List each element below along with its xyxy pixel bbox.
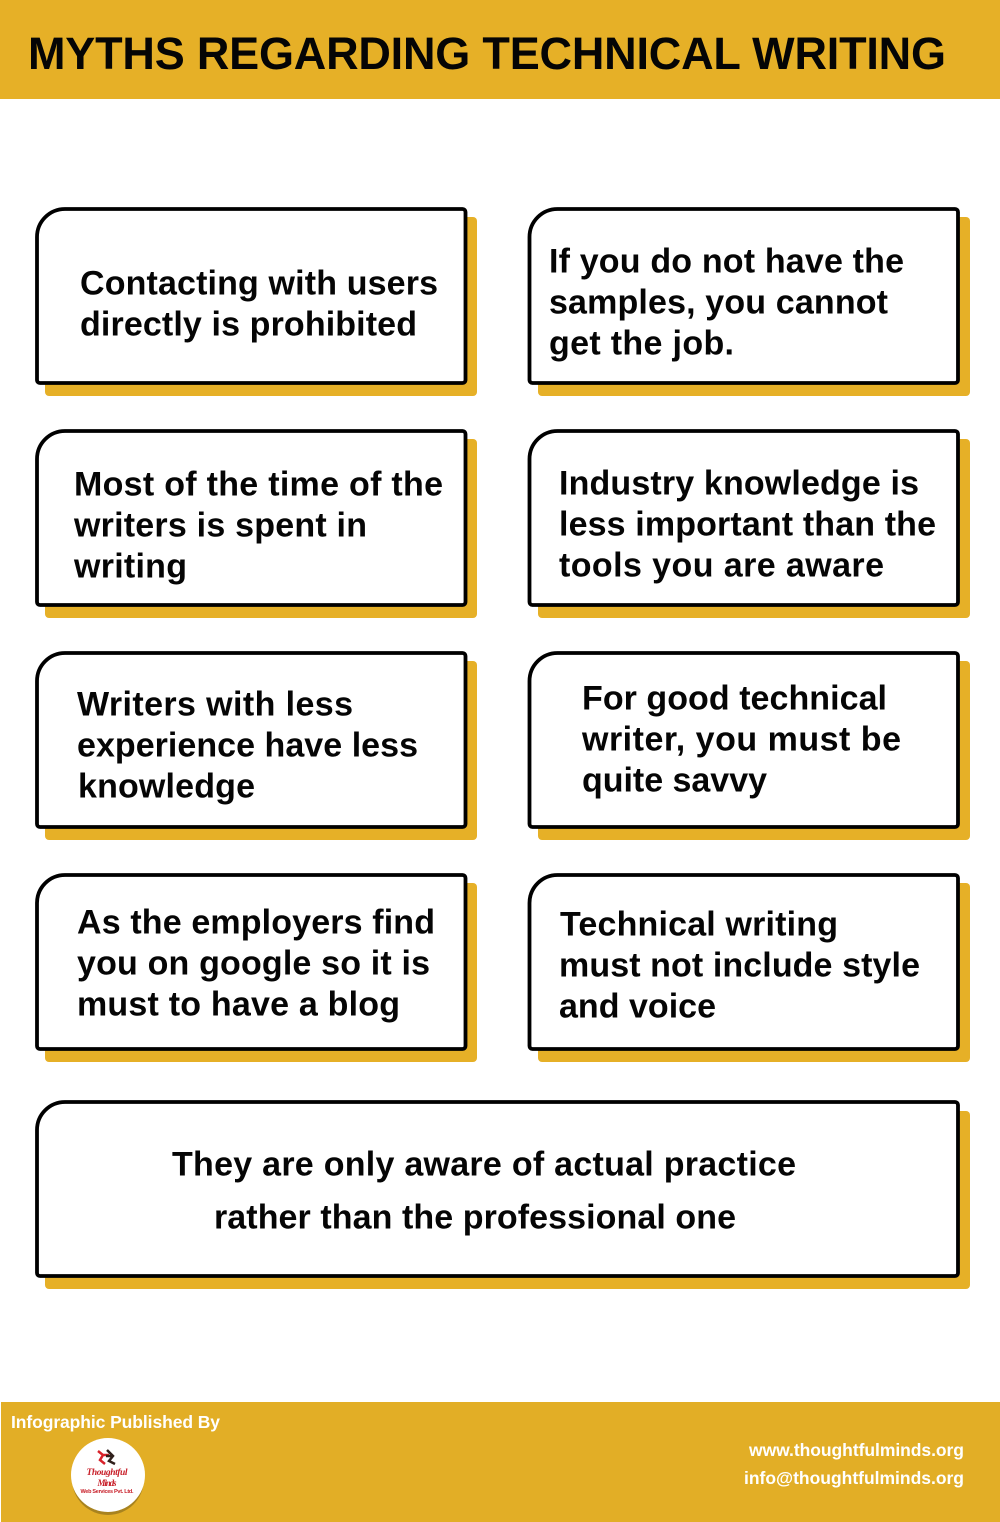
panel: myth 6 bbox=[530, 653, 970, 840]
myth 4 text bbox=[559, 464, 936, 584]
myth 3 text: Most of the time of the bbox=[74, 466, 443, 504]
myth 7 text: you on google so it is bbox=[77, 944, 430, 982]
myth 2 text bbox=[549, 242, 904, 362]
myth 9 text: rather than the professional one bbox=[214, 1198, 736, 1236]
myth 8 text bbox=[559, 906, 920, 1026]
myth 8 text: must not include style bbox=[559, 946, 920, 984]
footer contact details: www.thoughtfulminds.org bbox=[748, 1440, 964, 1460]
myth 9 text bbox=[172, 1146, 796, 1236]
panel: myth 8 bbox=[530, 875, 970, 1062]
myth 4 text: less important than the bbox=[559, 506, 936, 544]
myth 1 text bbox=[80, 264, 438, 344]
footer contact details bbox=[744, 1440, 964, 1488]
myth 8 text: Technical writing bbox=[560, 906, 838, 944]
footer contact details: info@thoughtfulminds.org bbox=[744, 1468, 964, 1488]
panel: myth 2 bbox=[530, 209, 970, 396]
panel: myth 4 bbox=[530, 431, 970, 618]
icon: publisher logo: Thoughtful bbox=[86, 1468, 128, 1478]
footer band bbox=[1, 1402, 1000, 1522]
myth 3 text: writing bbox=[73, 548, 187, 586]
footer heading: Infographic Published By bbox=[11, 1412, 220, 1432]
myth 4 text: Industry knowledge is bbox=[559, 464, 919, 502]
myth 1 text: directly is prohibited bbox=[80, 306, 417, 344]
myth 5 text: experience have less bbox=[77, 726, 418, 764]
myth 2 text: samples, you cannot bbox=[549, 284, 888, 322]
myth 6 text bbox=[581, 680, 901, 800]
title: MYTHS REGARDING TECHNICAL WRITING bbox=[28, 28, 946, 79]
myth 5 text: knowledge bbox=[78, 768, 255, 806]
myth 6 text: quite savvy bbox=[582, 762, 767, 800]
icon: publisher logo: Minds bbox=[96, 1478, 117, 1488]
panel: myth 5 bbox=[37, 653, 477, 840]
myth 5 text: Writers with less bbox=[77, 686, 353, 724]
icon: publisher logo: Web Services Pvt. Ltd. bbox=[80, 1489, 134, 1495]
myth 5 text bbox=[77, 686, 418, 806]
myth 2 text: If you do not have the bbox=[549, 242, 904, 280]
myth 8 text: and voice bbox=[559, 988, 716, 1026]
panel: myth 7 bbox=[37, 875, 477, 1062]
myth 7 text: must to have a blog bbox=[77, 986, 400, 1024]
panel: myth 1 bbox=[37, 209, 477, 396]
myth 9 text: They are only aware of actual practice bbox=[172, 1146, 796, 1184]
myth 4 text: tools you are aware bbox=[559, 546, 884, 584]
myth 6 text: For good technical bbox=[582, 680, 887, 718]
panel: myth 9 bbox=[37, 1102, 970, 1289]
panel: myth 3 bbox=[37, 431, 477, 618]
myth 7 text: As the employers find bbox=[77, 904, 435, 942]
myth 7 text bbox=[77, 904, 435, 1024]
myth 3 text: writers is spent in bbox=[73, 506, 367, 544]
icon: publisher logo bbox=[71, 1438, 145, 1515]
myth 3 text bbox=[73, 466, 443, 586]
myth 6 text: writer, you must be bbox=[581, 720, 901, 758]
header band bbox=[0, 0, 1000, 99]
myth 2 text: get the job. bbox=[549, 324, 734, 362]
myth 1 text: Contacting with users bbox=[80, 264, 438, 302]
